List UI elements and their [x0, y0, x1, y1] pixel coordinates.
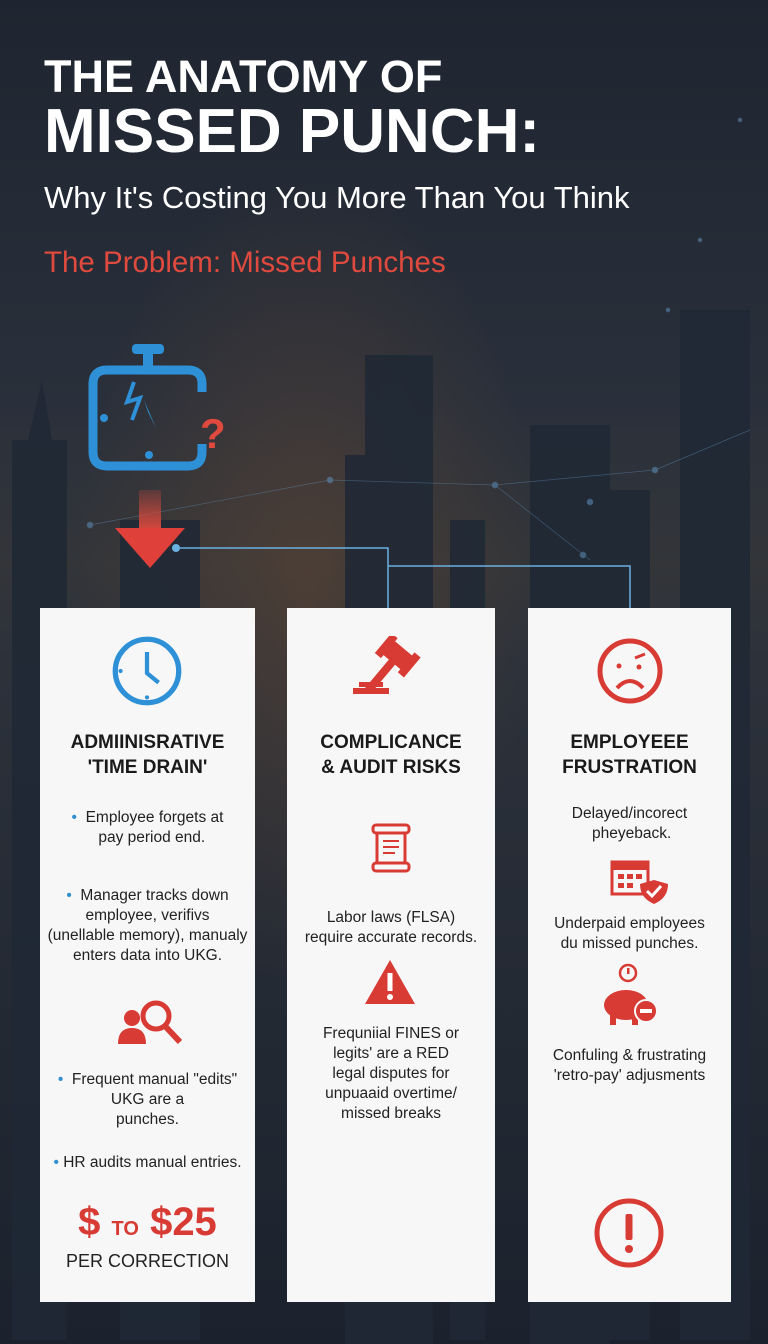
text: fines: missed breaks [341, 1105, 441, 1122]
icon: alert circle [594, 1198, 664, 1268]
panel: compliance [287, 608, 495, 1302]
heading: EMPLOYEEE [570, 732, 689, 753]
heading: ADMIINISRATIVE [71, 732, 224, 753]
stat: cost per correction [66, 1200, 229, 1271]
heading [71, 732, 224, 778]
stat: cost per correction: PER CORRECTION [66, 1251, 229, 1271]
panel: administrative time drain [40, 608, 255, 1302]
text: delayed paycheck: Delayed/incorect [572, 805, 687, 822]
text: retro pay: Confuling & frustrating [553, 1047, 706, 1064]
bullet list [48, 809, 248, 964]
text: labor laws: Labor laws (FLSA) [327, 909, 455, 926]
arrow: down [115, 490, 185, 568]
icon: scroll [372, 824, 410, 872]
text: labor laws [305, 909, 477, 946]
title: MISSED PUNCH: [44, 97, 540, 166]
heading [320, 732, 462, 778]
panel: administrative time drain: pay period end. [98, 829, 205, 846]
panel: administrative time drain: (unellable memory), manualy [48, 927, 247, 944]
panel: administrative time drain: • HR audits manual entries. [53, 1154, 242, 1171]
heading: COMPLICANCE [320, 732, 462, 753]
text: labor laws: require accurate records. [305, 929, 477, 946]
icon: sad face [598, 638, 662, 704]
title [44, 51, 540, 166]
icon: broken clock: ? [200, 410, 226, 457]
text: underpaid: Underpaid employees [554, 915, 705, 932]
icon: calendar shield [610, 860, 668, 904]
text: fines [323, 1025, 459, 1122]
text: delayed paycheck: pheyeback. [592, 825, 671, 842]
text: delayed paycheck [572, 805, 688, 842]
heading [562, 732, 697, 778]
icon: person search [118, 1000, 182, 1044]
text: underpaid: du missed punches. [561, 935, 698, 952]
section heading: The Problem: Missed Punches [44, 246, 446, 279]
text: retro pay [553, 1047, 706, 1084]
panel: administrative time drain: • Manager tracks down [66, 887, 229, 904]
text: underpaid [554, 915, 705, 952]
icon: piggy bank [604, 964, 656, 1025]
bullet list 2: UKG are a [111, 1091, 184, 1108]
icon: gavel [353, 636, 420, 694]
text: fines: Frequniial FINES or [323, 1025, 459, 1042]
bullet list 2 [58, 1071, 237, 1128]
heading: & AUDIT RISKS [321, 757, 461, 778]
bullet list 2: • Frequent manual "edits" [58, 1071, 237, 1088]
subtitle: Why It's Costing You More Than You Think [44, 180, 630, 215]
heading: 'TIME DRAIN' [88, 757, 207, 778]
text: fines: legits' are a RED [333, 1045, 449, 1062]
text: fines: unpuaaid overtime/ [325, 1085, 457, 1102]
panel: administrative time drain: enters data into UKG. [73, 947, 222, 964]
panel: employee frustration [528, 608, 731, 1302]
bullet list 2: punches. [116, 1111, 179, 1128]
icon: warning [365, 960, 415, 1004]
text: fines: legal disputes for [332, 1065, 450, 1082]
text: retro pay: 'retro-pay' adjusments [554, 1067, 705, 1084]
heading: FRUSTRATION [562, 757, 697, 778]
icon: clock [112, 636, 182, 706]
icon: broken clock [88, 344, 226, 470]
connector lines [172, 544, 631, 608]
title: THE ANATOMY OF [44, 51, 442, 102]
panel: administrative time drain: employee, verifivs [85, 907, 210, 924]
panel: administrative time drain: • Employee forgets at [72, 809, 223, 826]
stat: cost per correction: $ TO $25 [78, 1200, 217, 1244]
